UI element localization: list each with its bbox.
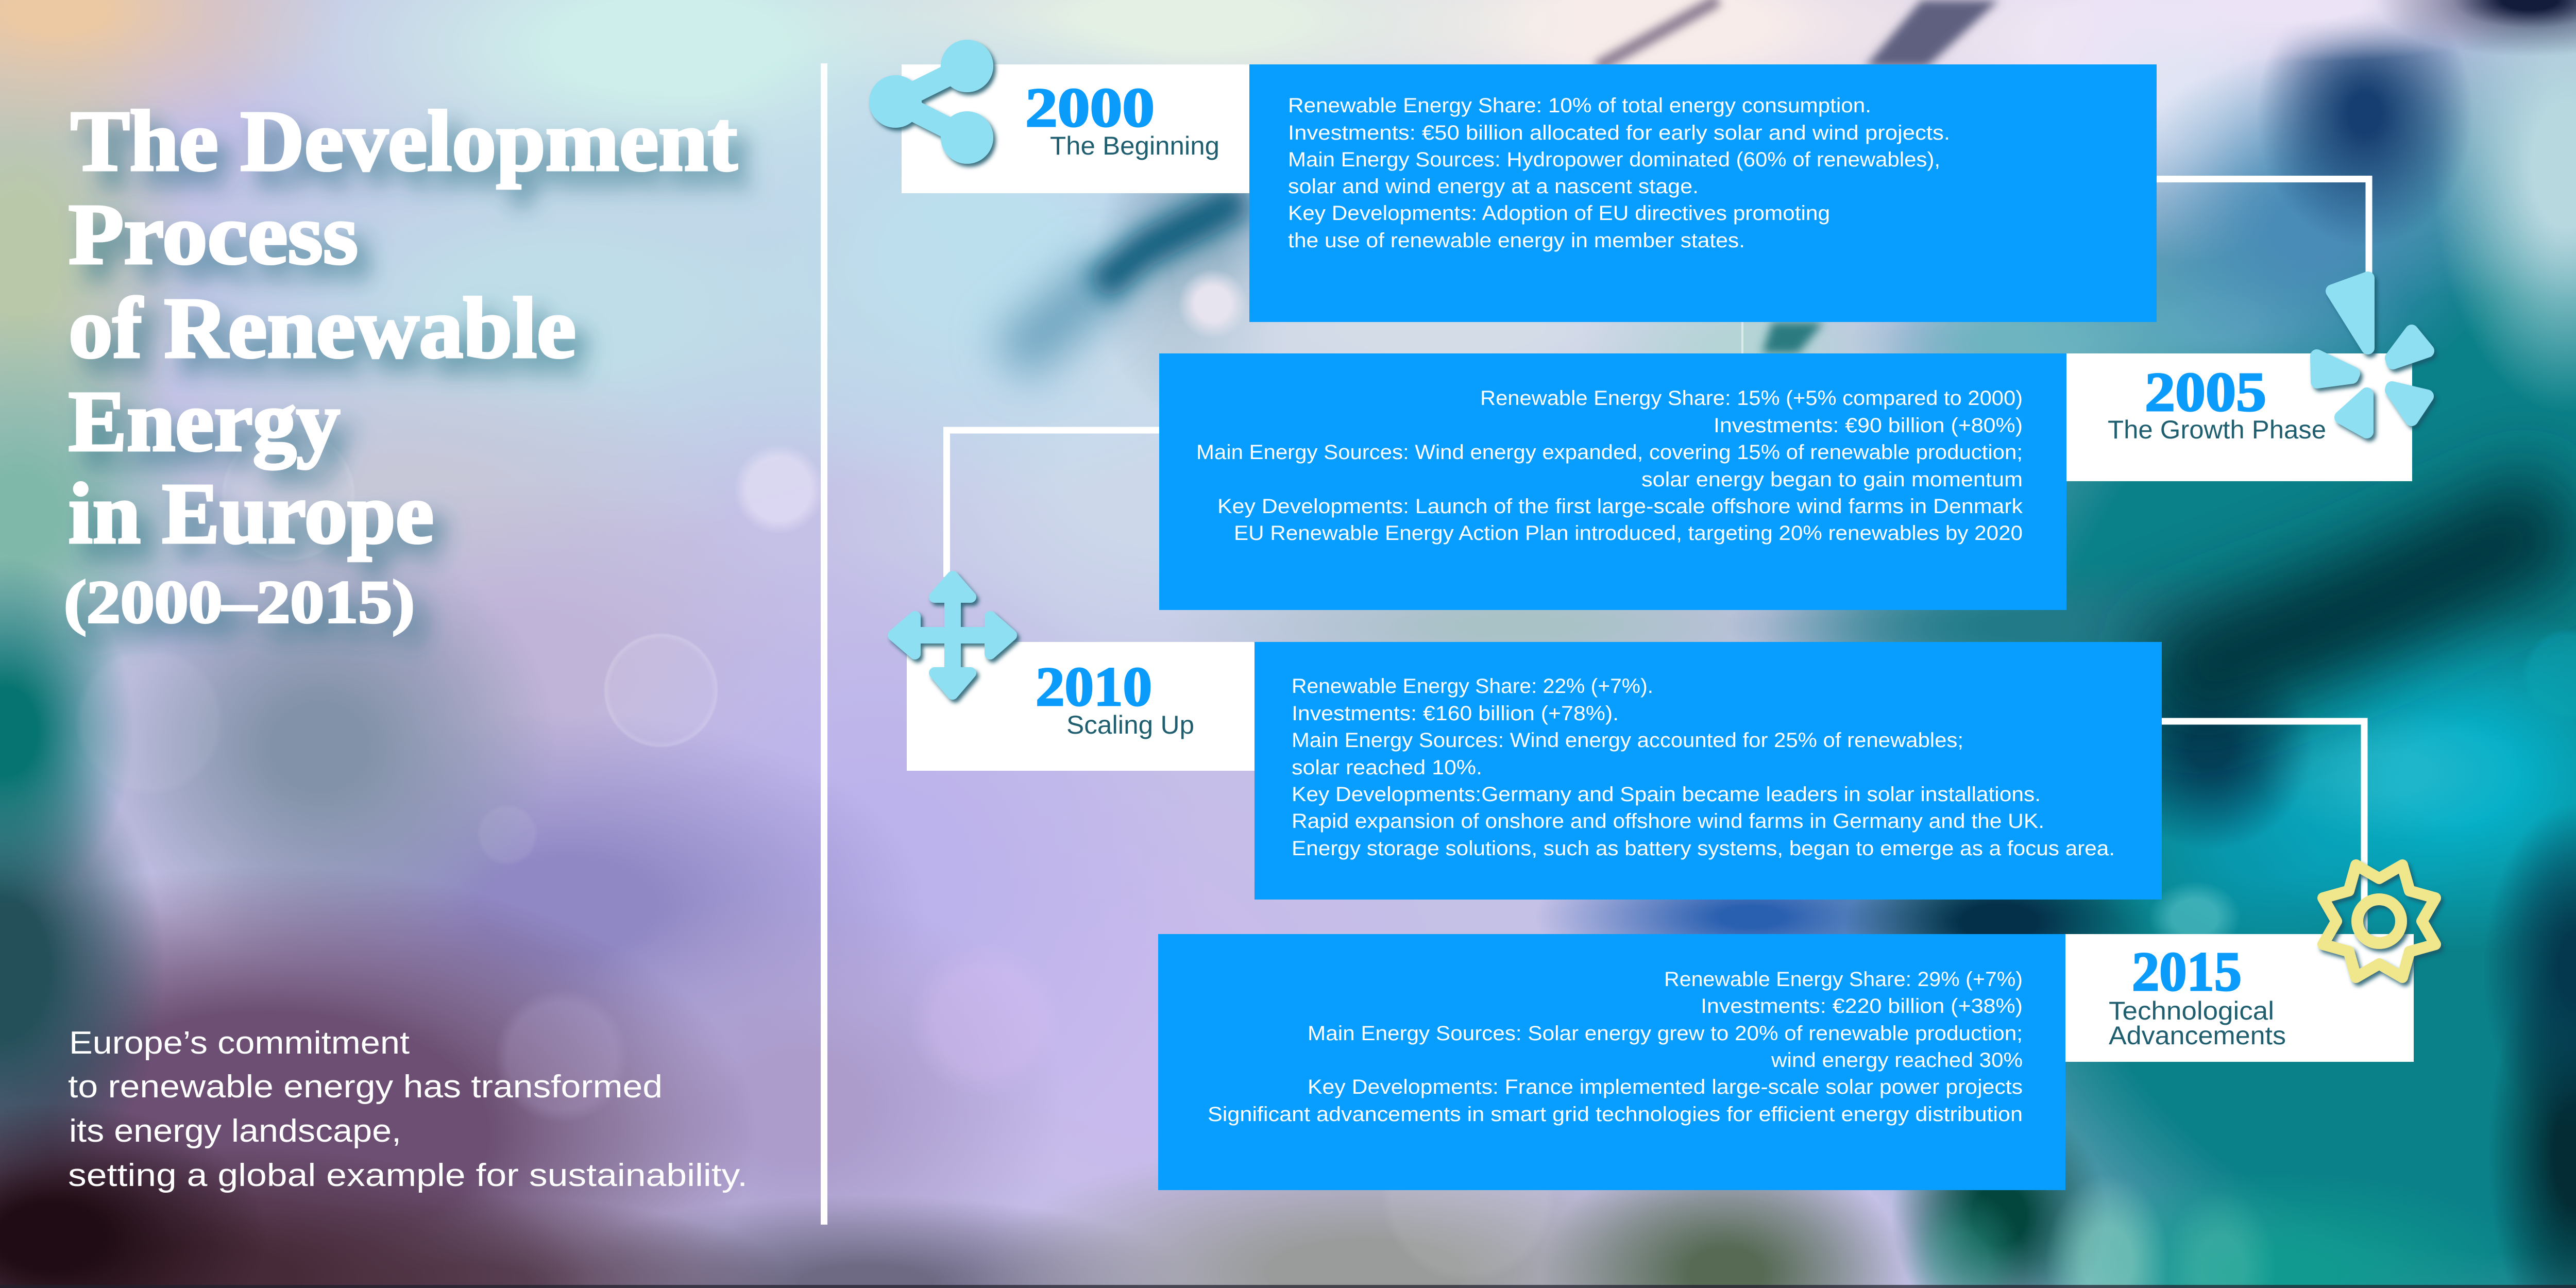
title: Process [69, 187, 358, 282]
details text 2015: Key Developments: France implemented large-scale solar power projects [1308, 1076, 2023, 1098]
panel: 2015 [1158, 865, 2435, 1190]
year 2010: 2010 [1036, 656, 1152, 718]
details text 2010: Key Developments:Germany and Spain became leaders in solar installations. [1292, 783, 2041, 806]
intro paragraph: setting a global example for sustainability. [68, 1158, 748, 1193]
details text 2000: the use of renewable energy in member states. [1288, 229, 1745, 252]
details text 2015: wind energy reached 30% [1771, 1049, 2023, 1072]
details text 2005: Investments: €90 billion (+80%) [1714, 414, 2023, 437]
details text 2000: Renewable Energy Share: 10% of total energy consumption. [1288, 94, 1871, 117]
year 2000: 2000 [1025, 77, 1155, 139]
details text 2015: Significant advancements in smart grid technologies for efficient energy distribution [1208, 1103, 2023, 1126]
title: (2000–2015) [64, 568, 415, 636]
icon: burst petals [2317, 278, 2428, 432]
details text 2005: EU Renewable Energy Action Plan introduced, targeting 20% renewables by 2020 [1234, 522, 2023, 545]
details text 2015: Investments: €220 billion (+38%) [1701, 995, 2023, 1018]
title: in Europe [69, 466, 434, 562]
details card 2000 [1249, 64, 2157, 322]
connector: 2010 to 2015 [2162, 721, 2364, 935]
year 2015: 2015 [2132, 941, 2242, 1003]
label card 2005 [2066, 353, 2412, 481]
details text 2010: Investments: €160 billion (+78%). [1292, 702, 1619, 725]
details text 2005 [1196, 387, 2023, 545]
details card 2005 [1159, 353, 2066, 610]
details text 2010: Renewable Energy Share: 22% (+7%). [1292, 675, 1653, 698]
year 2005: 2005 [2145, 362, 2266, 423]
title: Energy [69, 374, 340, 469]
details text 2010: solar reached 10%. [1292, 756, 1482, 779]
subtitle: Technological Advancements: Advancements [2109, 1021, 2286, 1050]
subtitle: Scaling Up: Scaling Up [1066, 710, 1194, 739]
details card 2015 [1158, 934, 2065, 1190]
details text 2010 [1292, 675, 2115, 860]
details text 2010: Rapid expansion of onshore and offshore wind farms in Germany and the UK. [1292, 810, 2044, 833]
details text 2000: Key Developments: Adoption of EU directives promoting [1288, 202, 1830, 225]
subtitle: Technological Advancements [2109, 996, 2286, 1050]
label card 2010 [907, 642, 1255, 771]
details text 2005: Key Developments: Launch of the first large-scale offshore wind farms in Denmark [1217, 495, 2023, 518]
intro paragraph: Europe’s commitment [69, 1025, 410, 1061]
vertical divider [821, 63, 827, 1225]
subtitle: The Growth Phase: The Growth Phase [2108, 415, 2326, 444]
connector: 2000 to 2005 [2157, 179, 2369, 278]
intro paragraph: its energy landscape, [69, 1113, 401, 1149]
details text 2015: Main Energy Sources: Solar energy grew to 20% of renewable production; [1308, 1022, 2023, 1045]
icon: sun star [2323, 865, 2435, 977]
connector: 2005 to 2010 [947, 430, 1159, 577]
details text 2000 [1288, 94, 1950, 252]
subtitle: The Beginning: The Beginning [1050, 131, 1219, 160]
label card 2000 [902, 64, 1249, 193]
details card 2010 [1255, 642, 2162, 900]
intro paragraph [68, 1025, 748, 1193]
icon: share [869, 40, 993, 164]
details text 2010: Main Energy Sources: Wind energy accounted for 25% of renewables; [1292, 729, 1963, 752]
panel: 2005 [1159, 278, 2428, 610]
details text 2015 [1208, 968, 2023, 1126]
title: The Development [71, 93, 737, 189]
details text 2015: Renewable Energy Share: 29% (+7%) [1664, 968, 2023, 991]
details text 2000: Main Energy Sources: Hydropower dominated (60% of renewables), [1288, 148, 1940, 171]
intro paragraph: to renewable energy has transformed [68, 1069, 663, 1105]
panel: 2000 [869, 40, 2157, 322]
subtitle: Technological Advancements: Technological [2109, 996, 2274, 1025]
title [64, 93, 737, 636]
label card 2015 [2065, 934, 2414, 1062]
panel: 2010 [893, 577, 2162, 900]
details text 2005: Renewable Energy Share: 15% (+5% compared to 2000) [1480, 387, 2023, 410]
icon: four-way arrows [893, 577, 1011, 694]
details text 2010: Energy storage solutions, such as battery systems, began to emerge as a focus area. [1292, 837, 2115, 860]
details text 2005: Main Energy Sources: Wind energy expanded, covering 15% of renewable production; [1196, 441, 2023, 464]
details text 2000: solar and wind energy at a nascent stage. [1288, 175, 1699, 198]
title: of Renewable [69, 280, 576, 376]
details text 2005: solar energy began to gain momentum [1641, 468, 2023, 491]
details text 2000: Investments: €50 billion allocated for early solar and wind projects. [1288, 122, 1950, 144]
